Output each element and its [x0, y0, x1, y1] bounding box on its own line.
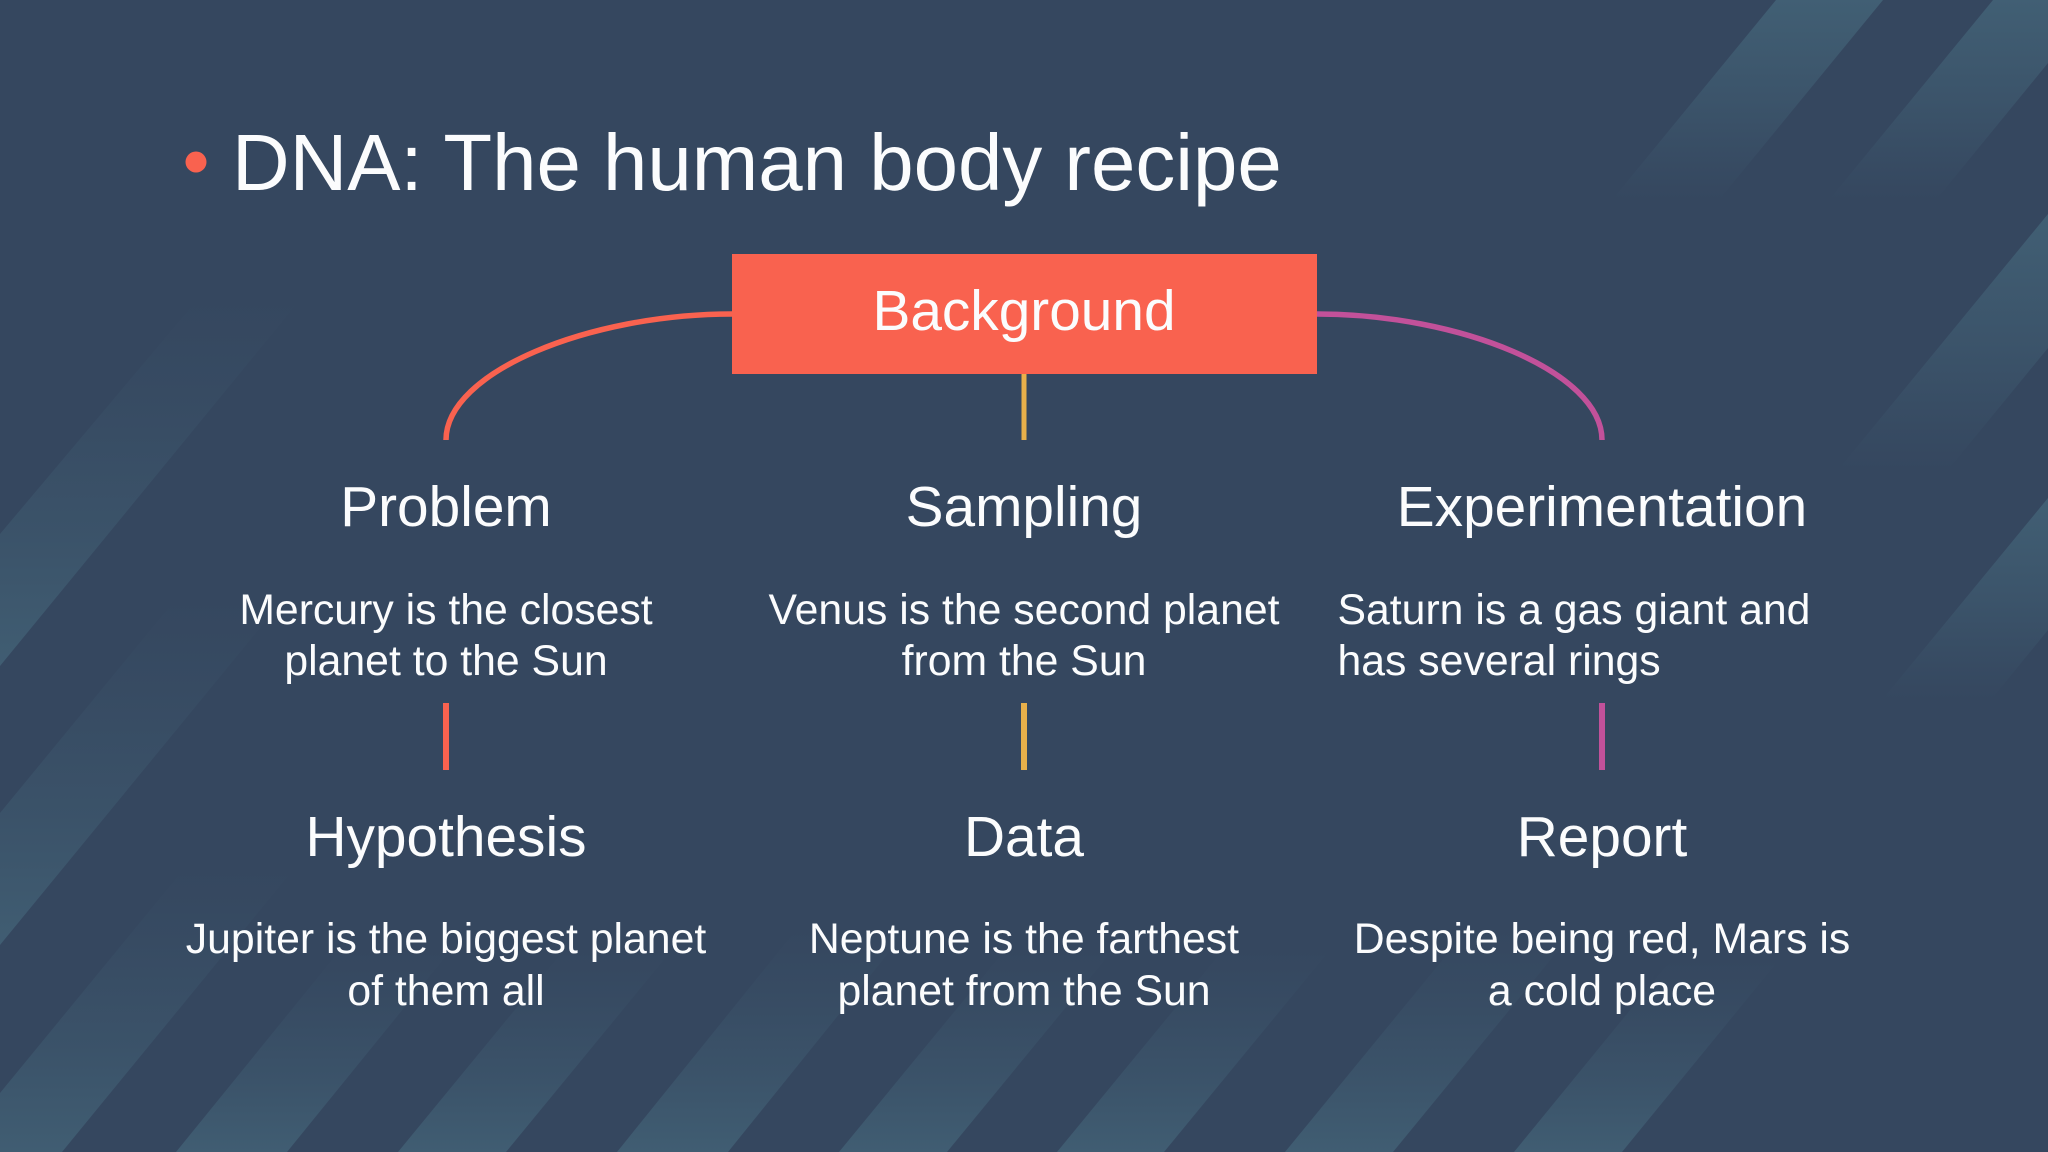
block: Data: Neptune is the farthest [809, 915, 1239, 963]
connector: right arc [1317, 314, 1602, 440]
connector: Problem to Hypothesis [443, 703, 449, 770]
block: Problem: planet to the Sun [284, 637, 608, 685]
block: Hypothesis: Hypothesis [306, 806, 586, 869]
block: Data: planet from the Sun [837, 967, 1211, 1015]
block: Hypothesis: Jupiter is the biggest planet [186, 915, 706, 963]
block: Report: Report [1517, 806, 1687, 869]
box: Background [732, 254, 1317, 374]
block: Hypothesis [186, 806, 706, 1015]
block: Data: Data [964, 806, 1084, 869]
block: Problem [239, 476, 653, 685]
block: Report: Despite being red, Mars is [1354, 915, 1850, 963]
block: Experimentation: Experimentation [1397, 476, 1807, 539]
block: Data [809, 806, 1239, 1015]
connector: Experimentation to Report [1599, 703, 1605, 770]
block: Hypothesis: of them all [347, 967, 545, 1015]
block: Sampling: Sampling [906, 476, 1142, 539]
block: Sampling [768, 476, 1280, 685]
box: Background: Background [872, 280, 1176, 343]
block: Report [1354, 806, 1850, 1015]
block: Problem: Problem [340, 476, 552, 539]
icon: title bullet [186, 152, 206, 172]
connector: left arc [446, 314, 732, 440]
block: Experimentation: Saturn is a gas giant and [1338, 586, 1810, 634]
block: Report: a cold place [1488, 967, 1716, 1015]
block: Sampling: Venus is the second planet [768, 586, 1280, 634]
block: Problem: Mercury is the closest [239, 586, 653, 634]
block: Sampling: from the Sun [902, 637, 1146, 685]
block: Experimentation [1338, 476, 1810, 685]
connector: centre line [1022, 374, 1026, 440]
title: DNA: The human body recipe [232, 118, 1282, 207]
connector: Sampling to Data [1021, 703, 1027, 770]
block: Experimentation: has several rings [1338, 637, 1661, 685]
